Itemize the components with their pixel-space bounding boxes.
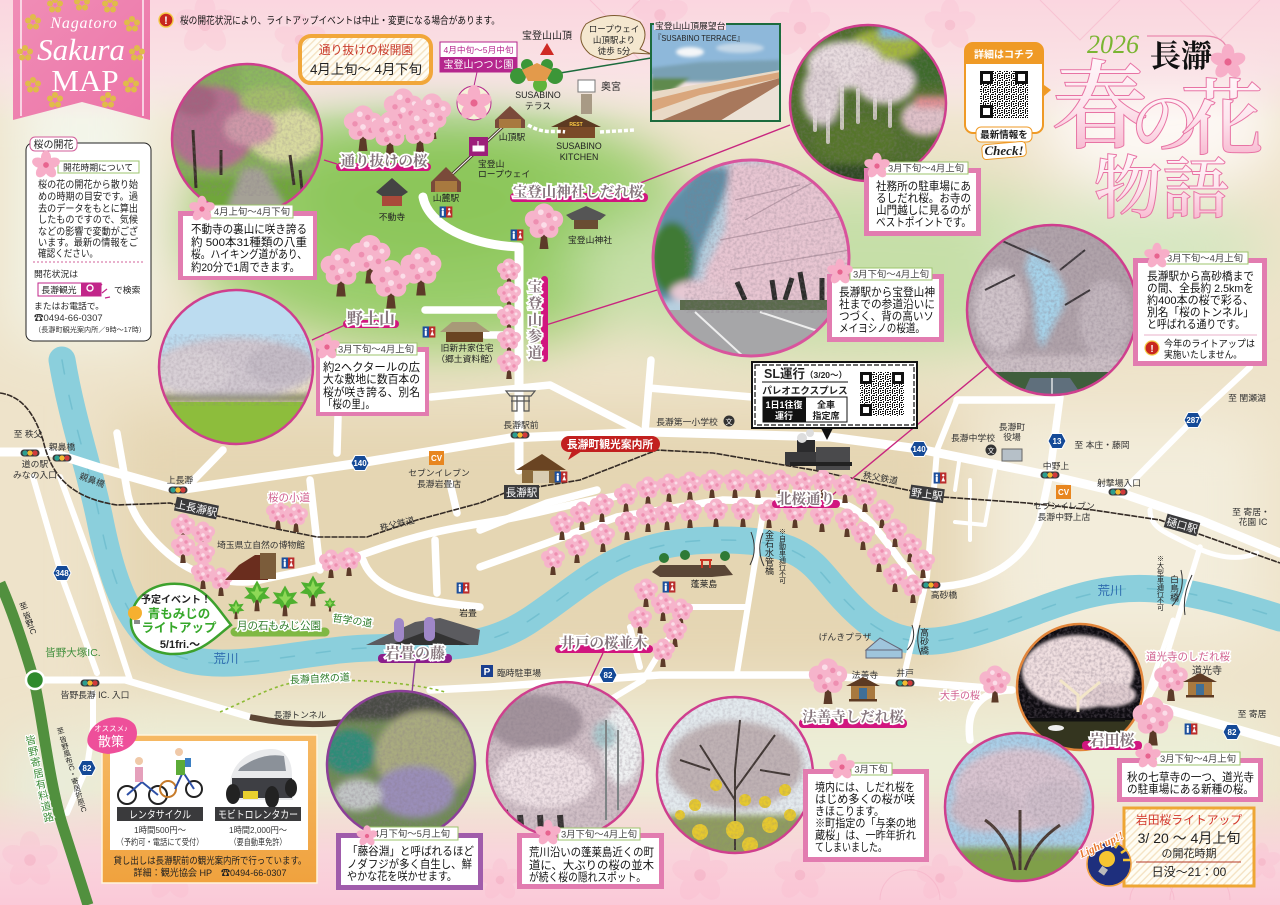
map labels: town west: 親鼻橋 <box>78 470 107 489</box>
text box: Hodosan shrine: るしだれ桜。お寺の <box>876 191 971 205</box>
ropeway line and stations <box>431 106 530 218</box>
route badges: 348 <box>55 569 69 578</box>
map labels: centre: 長瀞第一小学校 <box>656 416 718 427</box>
text box: Kitazakura: 3月下旬～4月上旬 <box>1167 252 1243 264</box>
connector lines <box>312 125 987 693</box>
photo ring: Nodoyama <box>159 290 313 444</box>
photo ring: Iwata night <box>1017 624 1143 750</box>
panel: SL Paleo Express: 運行 <box>775 410 793 421</box>
illustration: Mobitoro car <box>226 749 297 808</box>
banner: Nagatoro Sakura MAP: Nagatoro <box>49 15 118 32</box>
place name: Hozenji: 法善寺しだれ桜 <box>802 706 904 727</box>
panel: rentals: 詳細：観光協会 HP ☎0494-66-0307 <box>134 867 286 879</box>
panel: sakura bloom info: 長瀞観光 <box>41 284 77 295</box>
map labels: rotated roads: 至 皆野IC <box>18 600 38 636</box>
map labels: centre: げんきプラザ <box>819 632 872 642</box>
ropeway line and stations: ロープウェイ <box>478 169 530 179</box>
place name: Kitazakura-dori: 北桜通り <box>777 488 835 509</box>
text box: Hodosan shrine: 山門越しに見るのが <box>876 203 971 217</box>
text box: Sando: つづく、背の高いソ <box>839 309 934 323</box>
trees: Hozenji, Ote, Dokoji <box>809 658 1188 746</box>
map labels: east: ※大型車通行不可 <box>1156 555 1164 611</box>
map labels: east: 長瀞中野上店 <box>1038 511 1091 522</box>
map labels: east: 長瀞中学校 <box>951 432 995 443</box>
route badges: 140 <box>912 445 926 454</box>
panel: Iwata light-up: 日没～21：00 <box>1152 864 1227 879</box>
place name: Iwata: 岩田桜 <box>1089 729 1135 750</box>
notice line: 桜の開花状況により、ライトアップイベントは中止・変更になる場合があります。 <box>180 14 500 27</box>
map labels: town west: 上長瀞 <box>167 474 193 485</box>
place name: Nodoyama: 野土山 <box>347 306 395 329</box>
map labels: centre: 法善寺 <box>852 669 878 680</box>
banner: Nagatoro Sakura MAP: Sakura <box>37 32 125 67</box>
map labels: town west: セブンイレブン <box>408 467 470 478</box>
route badges: 287 <box>1186 416 1200 425</box>
map labels: east: 白鳥橋 <box>1169 574 1179 602</box>
photo: Toorinuke sakura <box>173 65 321 204</box>
title: 2026 Nagatoro Spring Flower Story: 春 <box>1052 31 1148 168</box>
text box: Kitazakura: 長瀞駅から高砂橋まで <box>1147 269 1254 283</box>
text box: Kitazakura: ! <box>1150 344 1154 355</box>
panel: rentals: 貸し出しは長瀞駅前の観光案内所で行っています。 <box>114 855 306 867</box>
panel: Iwata light-up: 3/ 20 ～ 4月上旬 <box>1138 830 1240 846</box>
railway: Chichibu line <box>0 393 1280 563</box>
text box: Sando <box>826 259 944 342</box>
map labels: town west: 荒川 <box>1097 584 1123 598</box>
photo ring: Kitazakura <box>967 225 1137 395</box>
map labels: centre: 高砂橋 <box>919 627 929 655</box>
photo ring: Hozenji <box>657 697 813 853</box>
icon: Hodosan shrine: 宝登山神社 <box>568 234 612 245</box>
icon: old Arai house <box>423 322 498 364</box>
map labels: town west: 長瀞岩畳店 <box>417 478 461 489</box>
text box: Kitazakura: と呼ばれる通りです。 <box>1147 318 1245 331</box>
panel: Iwata light-up <box>1124 808 1254 886</box>
badge: recommended stroll: オススメ♪ <box>94 724 128 733</box>
map labels: east: 花園 IC <box>1239 516 1268 527</box>
QR card: Check! <box>984 143 1024 158</box>
text box: Nodoyama <box>313 334 429 416</box>
station signs: 長瀞駅 <box>506 486 538 499</box>
photo ring: Hodosan shrine <box>790 25 946 181</box>
icon: Susabino kitchen: KITCHEN <box>560 152 598 162</box>
callout: green maple light-up event: 5/1fri.～ <box>160 639 200 651</box>
text box: Sando: メイヨシノの桜道。 <box>839 321 925 335</box>
ropeway line and stations: 山麓駅 <box>433 192 459 203</box>
callout: ropeway walking time: 徒歩 5分 <box>598 46 631 56</box>
path: summit walk <box>528 125 634 132</box>
QR card: 詳細はコチラ <box>974 48 1034 61</box>
map labels: centre: 文 <box>726 417 732 426</box>
panel: Iwata light-up: の開花時期 <box>1162 847 1216 860</box>
route badges: 82 <box>1228 728 1237 737</box>
text box: Hozenji: 蔵桜」は、一昨年折れ <box>815 828 916 842</box>
map labels: centre: 高砂橋 <box>931 589 957 600</box>
text box: Ido: 3月下旬～4月上旬 <box>561 828 637 840</box>
map labels: town west: 親鼻橋 <box>49 441 75 452</box>
map labels: centre: 大手の桜 <box>940 689 980 702</box>
text box: wisteria: 「藤谷淵」と呼ばれるほど <box>347 845 474 858</box>
text box: Hozenji: きほこります。 <box>815 805 884 818</box>
road network <box>0 197 1280 813</box>
text box: Toorinuke: 約20分で1周できます。 <box>191 260 300 274</box>
text box: Toorinuke: 不動寺の裏山に咲き誇る <box>191 222 307 236</box>
text box: Dokoji: 秋の七草寺の一つ、道光寺 <box>1127 770 1254 784</box>
trees: Nodoyama <box>321 235 441 308</box>
trees: Toorinuke <box>344 88 451 157</box>
trees: Sando row <box>497 258 521 379</box>
photo: Susabino Terrace <box>560 20 780 121</box>
map labels: town west: 長瀞自然の道 <box>290 670 350 687</box>
text box: Kitazakura: 実施いたしません。 <box>1164 348 1242 361</box>
map labels: centre: 長瀞駅前 <box>503 419 539 430</box>
map labels: east: 役場 <box>1003 431 1021 442</box>
icon: Okumiya shrine <box>578 80 621 114</box>
icons: municipal office, stores, temples: CV <box>431 454 443 463</box>
tag: azalea garden: 宝登山つつじ園 <box>444 58 514 71</box>
panel: sakura bloom info: で検索 <box>114 284 141 295</box>
nature trail <box>220 680 445 712</box>
text box: wisteria: 4月下旬～5月上旬 <box>374 828 450 839</box>
text box: Nodoyama: 3月下旬～4月上旬 <box>338 344 414 354</box>
icon: Hodosan shrine <box>511 203 612 249</box>
panel: sakura bloom info: います。最新の情報をご <box>38 236 138 249</box>
map labels: rotated roads: 皆野寄居有料道路 <box>23 734 55 824</box>
text box: Kitazakura: の間、全長約 2.5kmを <box>1147 281 1254 295</box>
text box: Ido: が続く桜の隠れスポット。 <box>529 870 646 884</box>
photo ring: Toorinuke <box>172 64 322 214</box>
station signs: 樋口駅 <box>1165 515 1199 536</box>
icon: old Arai house: （郷土資料館） <box>436 353 498 364</box>
text box: Kitazakura: 今年のライトアップは <box>1164 337 1255 350</box>
map labels: east: 中野上 <box>1043 460 1069 471</box>
photo ring: Sando <box>653 160 849 356</box>
map labels: town west: 皆野大塚IC. <box>45 646 101 659</box>
text box: Sando: 長瀞駅から宝登山神 <box>839 285 935 299</box>
map labels: centre: 秩父鉄道 <box>862 469 899 486</box>
panel: rentals: 1時間500円～ <box>134 825 186 835</box>
photo ring: wisteria <box>327 691 475 839</box>
panel: rentals: （予約可・電話にて受付） <box>116 837 204 847</box>
panel: rentals: モビトロレンタカー <box>218 809 298 821</box>
tunnel <box>250 717 345 724</box>
text box: Hozenji: ※町指定の「与楽の地 <box>815 816 916 830</box>
text box: Hodosan shrine: 3月下旬～4月上旬 <box>888 162 964 174</box>
icon: Susabino terrace: SUSABINO <box>515 90 561 100</box>
ropeway line and stations: 宝登山 <box>478 159 504 169</box>
QR card: 最新情報を <box>980 129 1028 141</box>
icon: interchange marker <box>26 671 44 689</box>
panel: sakura bloom info: ☎0494-66-0307 <box>34 313 103 324</box>
banner: Nagatoro Sakura MAP <box>13 0 150 120</box>
icon: Fudoji temple: 不動寺 <box>379 212 405 222</box>
panel: Iwata light-up: 岩田桜ライトアップ <box>1136 813 1242 827</box>
text box: Dokoji: の駐車場にある新種の桜。 <box>1127 782 1254 796</box>
panel: sakura bloom info: （長瀞町観光案内所／9時～17時） <box>34 325 146 334</box>
map labels: east: 長瀞町 <box>999 421 1025 432</box>
icon: Susabino kitchen <box>551 115 602 162</box>
panel: sakura bloom info: したものですので、気候 <box>38 213 138 226</box>
text box: Hodosan shrine: 社務所の駐車場にあ <box>876 179 971 193</box>
map labels: centre: ※自動車通行不可 <box>778 528 786 584</box>
photo: Hodosan shrine weeping sakura <box>788 24 950 185</box>
panel: SL Paleo Express: 1日1往復 <box>765 399 803 410</box>
map labels: town west: 荒川 <box>213 652 239 666</box>
trees: museum and Sakura lane <box>171 500 361 596</box>
map labels: east <box>951 392 1270 719</box>
photo: Hozenji weeping sakura <box>658 698 812 852</box>
title: 2026 Nagatoro Spring Flower Story: の <box>1130 68 1200 169</box>
panel: sakura bloom info: などの影響で変動がござ <box>38 225 138 238</box>
banner: Nagatoro Sakura MAP: MAP <box>51 63 119 98</box>
text box: Nodoyama: 大な敷地に数百本の <box>323 372 420 386</box>
icon: Susabino kitchen: REST <box>569 122 583 128</box>
panel: SL Paleo Express: SL運行（3/20～） <box>764 366 847 381</box>
photo: Kitazakura tunnel <box>968 226 1133 394</box>
map labels: town west: 秩父鉄道 <box>379 514 416 533</box>
maple park <box>228 576 373 632</box>
photo ring: Iwata day <box>945 733 1093 881</box>
text box: Hozenji <box>803 754 929 862</box>
text box: Dokoji <box>1117 743 1263 802</box>
text box: Hodosan shrine: ベストポイントです。 <box>876 216 971 229</box>
callout: green maple light-up event: 予定イベント！ <box>141 594 211 606</box>
icon: Nagatoro station building <box>516 454 567 483</box>
notice line: ! <box>164 15 168 27</box>
bloom badge: open period: 通り抜けの桜開園 <box>319 43 413 57</box>
text box: Toorinuke: 桜。ハイキング道があり、 <box>191 247 307 261</box>
map labels: east: 至 寄居・ <box>1232 506 1270 517</box>
summit marker <box>522 29 572 55</box>
route badges: 13 <box>1053 437 1062 446</box>
photo: Nodoyama field <box>160 291 312 443</box>
bloom badge: open period <box>300 36 431 83</box>
station signs <box>174 485 1200 536</box>
map labels: rotated roads <box>18 600 89 824</box>
text box: Hozenji: 境内には、しだれ桜を <box>815 780 915 794</box>
panel: rentals: レンタサイクル <box>129 809 191 821</box>
panel: sakura bloom info: 確認ください。 <box>38 247 98 260</box>
map labels: town west: 埼玉県立自然の博物館 <box>217 539 305 550</box>
park: Horai island: 蓬莱島 <box>691 578 717 589</box>
map labels: rotated roads: 至 皆野風布IC・寄居折原IC <box>56 726 89 813</box>
panel: sakura bloom info: またはお電話で。 <box>34 301 104 311</box>
title: 2026 Nagatoro Spring Flower Story: 2026 <box>1087 30 1139 59</box>
map labels: east: セブンイレブン <box>1033 500 1095 511</box>
icons: municipal office, stores, temples <box>225 449 1217 702</box>
map labels: centre: 臨時駐車場 <box>497 667 541 678</box>
text box: Sando: 3月下旬～4月上旬 <box>853 268 929 280</box>
map labels: east: 至 閨瀬湖 <box>1228 392 1266 403</box>
place name: Iwadatami wisteria: 岩畳の藤 <box>385 642 445 663</box>
callout: green maple light-up event <box>131 584 231 654</box>
icon: light bulb <box>128 606 142 624</box>
map labels: town west: 至 秩父 <box>14 429 43 439</box>
text box: Kitazakura: 別名「桜のトンネル」 <box>1147 305 1254 319</box>
place name: Hodosan shrine sakura: 宝登山神社しだれ桜 <box>513 181 644 202</box>
icon: Susabino terrace: テラス <box>525 101 551 111</box>
badge: light up bulb <box>1077 830 1131 886</box>
text box: Hozenji: はじめ多くの桜が咲 <box>815 792 915 806</box>
icon: Fudoji temple <box>376 178 408 222</box>
icon: Susabino terrace <box>510 59 563 111</box>
text box: Toorinuke: 約 500本31種類の八重 <box>191 235 307 249</box>
map labels: town west: 長瀞トンネル <box>274 709 327 720</box>
map labels: east: 道光寺のしだれ桜 <box>1146 650 1230 663</box>
callout: green maple light-up event: 青もみじの <box>148 606 210 621</box>
expressway: Minano Yorii toll road <box>0 583 88 905</box>
illustration: bicycles <box>118 748 202 804</box>
panel: sakura bloom info: めの時期の目安です。過 <box>38 191 138 203</box>
map labels: town west: 道の駅 <box>22 458 48 469</box>
tag: azalea garden <box>440 42 517 121</box>
map labels: town west: 皆野長瀞 IC. 入口 <box>61 689 129 700</box>
title: 2026 Nagatoro Spring Flower Story: 語 <box>1163 136 1229 231</box>
text box: Nodoyama: 「桜の里」。 <box>323 397 375 411</box>
title: 2026 Nagatoro Spring Flower Story: 物 <box>1094 135 1162 232</box>
text box: Hodosan shrine <box>863 153 981 236</box>
route badges: 140 <box>353 459 367 468</box>
panel: sakura bloom info: 開花状況は <box>34 268 78 279</box>
text box: Hozenji: てしまいました。 <box>815 841 887 854</box>
photo ring: Ido <box>487 682 643 838</box>
map labels: centre <box>497 416 980 702</box>
text box: Dokoji: 3月下旬～4月上旬 <box>1160 753 1236 764</box>
callout: ropeway walking time: 山頂駅より <box>593 35 635 45</box>
place name: Hodosan Sando: 宝登山参道 <box>524 279 546 362</box>
panel: SL Paleo Express: 全車 <box>817 399 835 410</box>
callout: ropeway walking time: ロープウェイ <box>589 24 639 34</box>
photo: Susabino Terrace: 宝登山山頂展望台 <box>655 20 726 31</box>
maple park: 哲学の道 <box>332 611 373 630</box>
title: 2026 Nagatoro Spring Flower Story: 長瀞 <box>1150 31 1214 76</box>
icon: Susabino kitchen: SUSABINO <box>556 141 602 151</box>
text box: wisteria: やかな花を咲かせます。 <box>347 869 457 883</box>
steam locomotive <box>785 429 852 470</box>
callout: ropeway walking time <box>581 15 651 60</box>
text box: Kitazakura <box>1133 243 1267 366</box>
photo: Iwata sakura daytime <box>943 731 1095 886</box>
icon: parking sign: P <box>484 667 491 678</box>
photo: Iwata sakura at night <box>1015 622 1145 752</box>
badge: recommended stroll: 散策 <box>98 734 124 749</box>
text box: Ido: 道に、大ぶりの桜の並木 <box>529 858 654 872</box>
photo: Susabino Terrace: 『SUSABINO TERRACE』 <box>654 33 744 43</box>
panel: sakura bloom info: 去のデータをもとに算出 <box>38 202 138 215</box>
trees: Kitazakura-dori <box>541 470 935 603</box>
QR card <box>965 43 1051 160</box>
route badges: 82 <box>83 764 92 773</box>
ropeway line and stations: 山頂駅 <box>499 132 525 142</box>
photo: Sando cherry road <box>654 162 848 354</box>
icon: Iwadatami rocks and wisteria: 岩畳 <box>459 607 477 618</box>
map labels: east: 至 本庄・藤岡 <box>1074 439 1130 450</box>
map labels: centre: 金石水管橋 <box>764 529 774 576</box>
panel: sakura bloom info: 桜の開花 <box>34 138 74 151</box>
text box: Nodoyama: 約2ヘクタールの広 <box>323 360 420 374</box>
text box: Nodoyama: 桜が咲き誇る、別名 <box>323 385 420 399</box>
tourist office tag: 長瀞町観光案内所 <box>567 437 653 451</box>
notice line <box>159 13 500 27</box>
panel: SL Paleo Express: 指定席 <box>812 410 840 421</box>
place name: Ido: 井戸の桜並木 <box>560 632 648 653</box>
place name: Toorinuke: 通り抜けの桜 <box>340 150 428 171</box>
panel: SL Paleo Express <box>752 362 917 440</box>
map labels: east: 射撃場入口 <box>1097 477 1141 488</box>
text box: Sando: 社までの参道沿いに <box>839 297 935 311</box>
panel: sakura bloom info: 開花時期について <box>63 162 133 172</box>
photo: Ido cherry row <box>488 683 642 831</box>
text box: Toorinuke <box>178 196 317 280</box>
route badges: 82 <box>604 671 613 680</box>
panel: rentals: 1時間2,000円～ <box>229 825 287 835</box>
text box: wisteria <box>336 825 483 890</box>
text box: Ido <box>517 820 664 889</box>
title: 2026 Nagatoro Spring Flower Story: 花 <box>1181 54 1263 171</box>
map labels: town west: 桜の小道 <box>268 491 310 504</box>
traffic signals <box>20 432 1128 686</box>
icons: municipal office, stores, temples: CV <box>1058 488 1070 497</box>
tourist office tag <box>561 436 660 460</box>
panel: rentals <box>102 735 317 883</box>
park: Horai island <box>652 550 733 593</box>
route badges <box>53 412 1241 776</box>
summit marker: 宝登山山頂 <box>522 29 572 42</box>
panel: sakura bloom info <box>26 137 151 341</box>
icon: old Arai house: 旧新井家住宅 <box>441 342 494 353</box>
panel: SL Paleo Express: パレオエクスプレス <box>762 386 848 397</box>
map labels: east: 道光寺 <box>1192 664 1222 677</box>
text box: Kitazakura: 約400本の桜で彩る、 <box>1147 293 1254 307</box>
torii at station front <box>506 391 535 411</box>
icon: Okumiya shrine: 奥宮 <box>601 80 621 93</box>
photo: Iwadatami wisteria <box>328 692 474 828</box>
title: 2026 Nagatoro Spring Flower Story <box>1052 30 1263 232</box>
icon: parking sign <box>481 665 493 678</box>
panel: rentals: （要自動車免許） <box>230 837 286 847</box>
badge: light up bulb: Light up!! <box>1077 830 1126 861</box>
panel: sakura bloom info: 桜の花の開花から散り始 <box>38 178 138 191</box>
text box: Toorinuke: 4月上旬～4月下旬 <box>214 206 290 217</box>
bridge brackets <box>750 532 1192 655</box>
icon: Iwadatami rocks and wisteria <box>366 607 480 645</box>
map labels: centre: 井戸 <box>896 667 914 678</box>
badge: recommended stroll <box>87 717 137 754</box>
restroom icons <box>282 472 1197 735</box>
station signs: 野上駅 <box>910 487 944 503</box>
bloom badge: open period: 4月上旬～ 4月下旬 <box>310 62 422 77</box>
text box: wisteria: ノダフジが多く自生し、鮮 <box>347 857 472 871</box>
map labels: town west: みなの入口 <box>13 470 57 480</box>
river: Arakawa <box>62 360 1280 663</box>
callout: green maple light-up event: ライトアップ <box>141 621 217 635</box>
trees: Ido row <box>628 578 693 667</box>
map labels: east: 至 寄居 <box>1238 708 1267 719</box>
text box: Ido: 荒川沿いの蓬莱島近くの町 <box>529 845 654 859</box>
map labels: east: 文 <box>988 446 994 455</box>
text box: Hozenji: 3月下旬 <box>854 764 888 774</box>
station signs: 上長瀞駅 <box>174 498 219 519</box>
tag: azalea garden: 4月中旬～5月中旬 <box>444 45 514 55</box>
maple park: 月の石もみじ公園 <box>237 620 321 632</box>
map labels: town west <box>13 429 1123 720</box>
